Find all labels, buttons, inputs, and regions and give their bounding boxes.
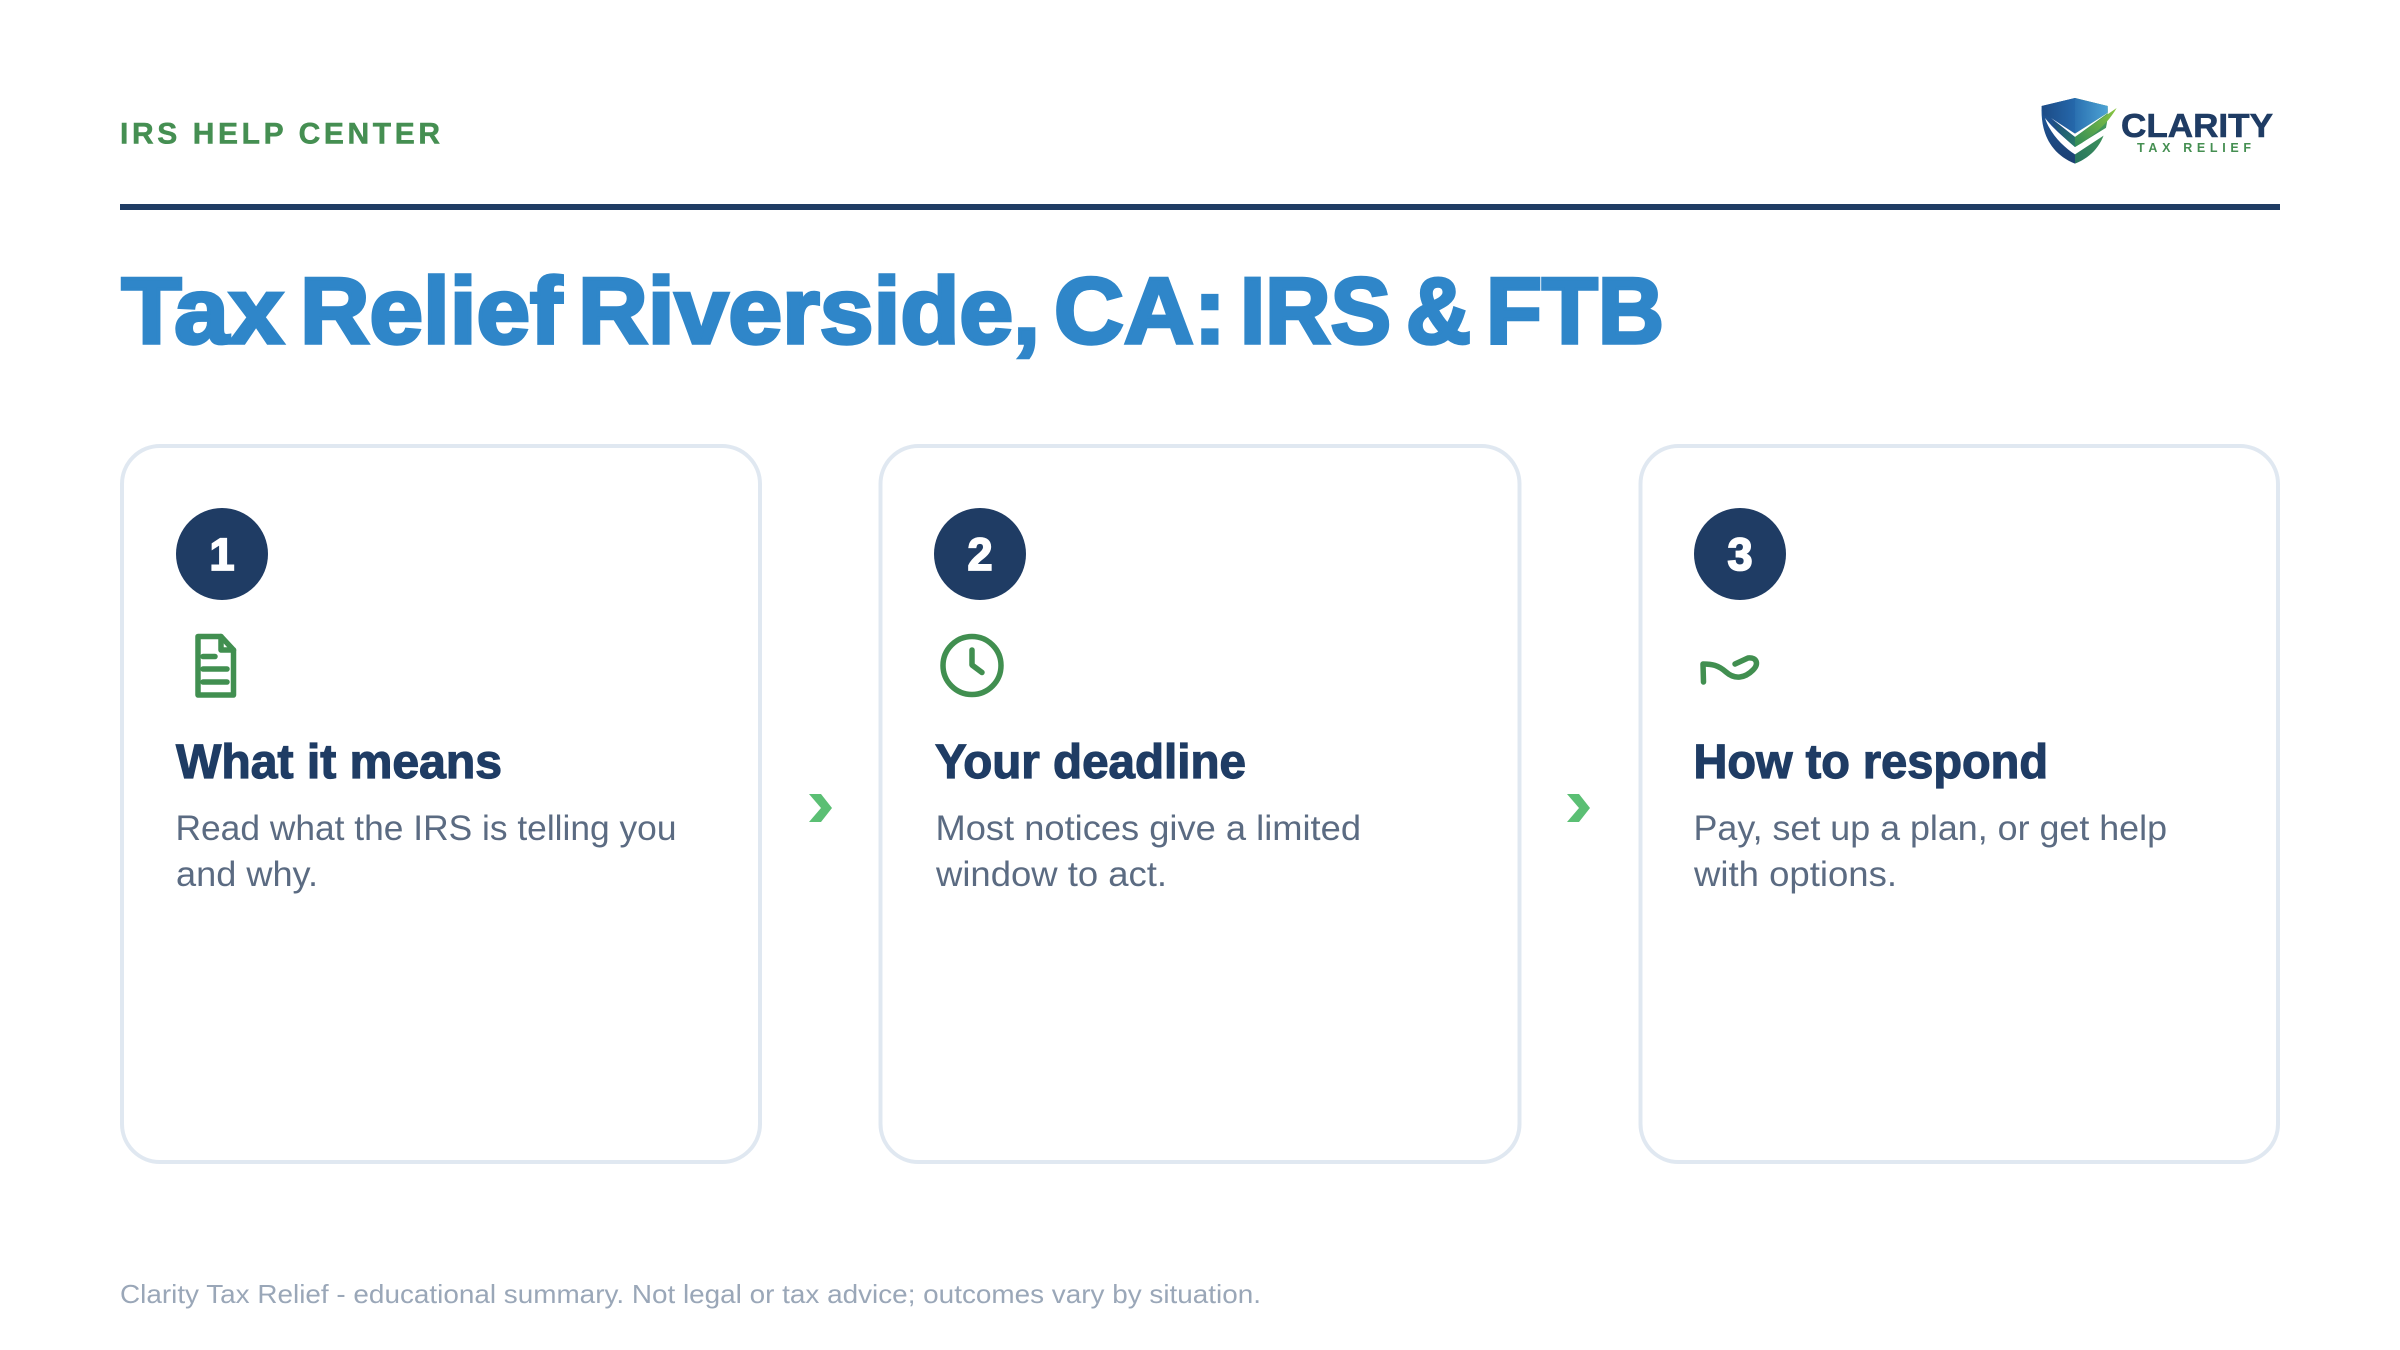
icon: clock: [943, 636, 1001, 694]
card body: window to act.: [935, 855, 1167, 894]
header rule: [120, 204, 2280, 210]
panel: how to respond: [1640, 446, 2278, 1162]
card heading: Your deadline: [935, 736, 1246, 789]
step number 1: [176, 508, 268, 600]
card body: [176, 809, 676, 894]
card body: and why.: [176, 855, 318, 894]
step number 1: 1: [209, 529, 235, 580]
card outline: [880, 446, 1520, 1162]
title: Tax: [122, 258, 284, 363]
icon: hand squiggle: [1703, 658, 1756, 682]
card body: Pay, set up a plan, or get help: [1694, 809, 2167, 848]
panel: your deadline: [880, 446, 1520, 1162]
logo: Clarity Tax Relief: [2042, 98, 2273, 164]
logo tagline: TAX RELIEF: [2137, 141, 2251, 155]
title: IRS: [1240, 258, 1391, 363]
title: Relief: [300, 258, 563, 363]
footer disclaimer: Clarity Tax Relief - educational summary. Not legal or tax advice; outcomes vary by situation.: [120, 1279, 1261, 1309]
step number 2: 2: [967, 529, 993, 580]
card body: [935, 809, 1361, 894]
card body: with options.: [1693, 855, 1897, 894]
card body: Read what the IRS is telling you: [176, 809, 676, 848]
title: Riverside,: [578, 258, 1040, 363]
icon: shield with checkmark: [2042, 98, 2117, 164]
card heading: What it means: [176, 736, 502, 789]
panel: what it means: [122, 446, 760, 1162]
icon: document: [198, 636, 234, 695]
step number 3: 3: [1727, 529, 1753, 580]
step number 2: [934, 508, 1026, 600]
title: [122, 258, 1664, 363]
header label: IRS HELP CENTER: [120, 118, 440, 150]
logo wordmark: CLARITY: [2121, 107, 2273, 144]
title: CA:: [1054, 258, 1226, 363]
arrow: step 2 to 3: [1567, 794, 1590, 822]
title: &: [1406, 258, 1471, 363]
step number 3: [1694, 508, 1786, 600]
arrow: step 1 to 2: [809, 794, 832, 822]
card outline: [1640, 446, 2278, 1162]
card heading: How to respond: [1694, 736, 2048, 789]
card body: Most notices give a limited: [936, 809, 1361, 848]
title: FTB: [1486, 258, 1664, 363]
card body: [1693, 809, 2167, 894]
card outline: [122, 446, 760, 1162]
